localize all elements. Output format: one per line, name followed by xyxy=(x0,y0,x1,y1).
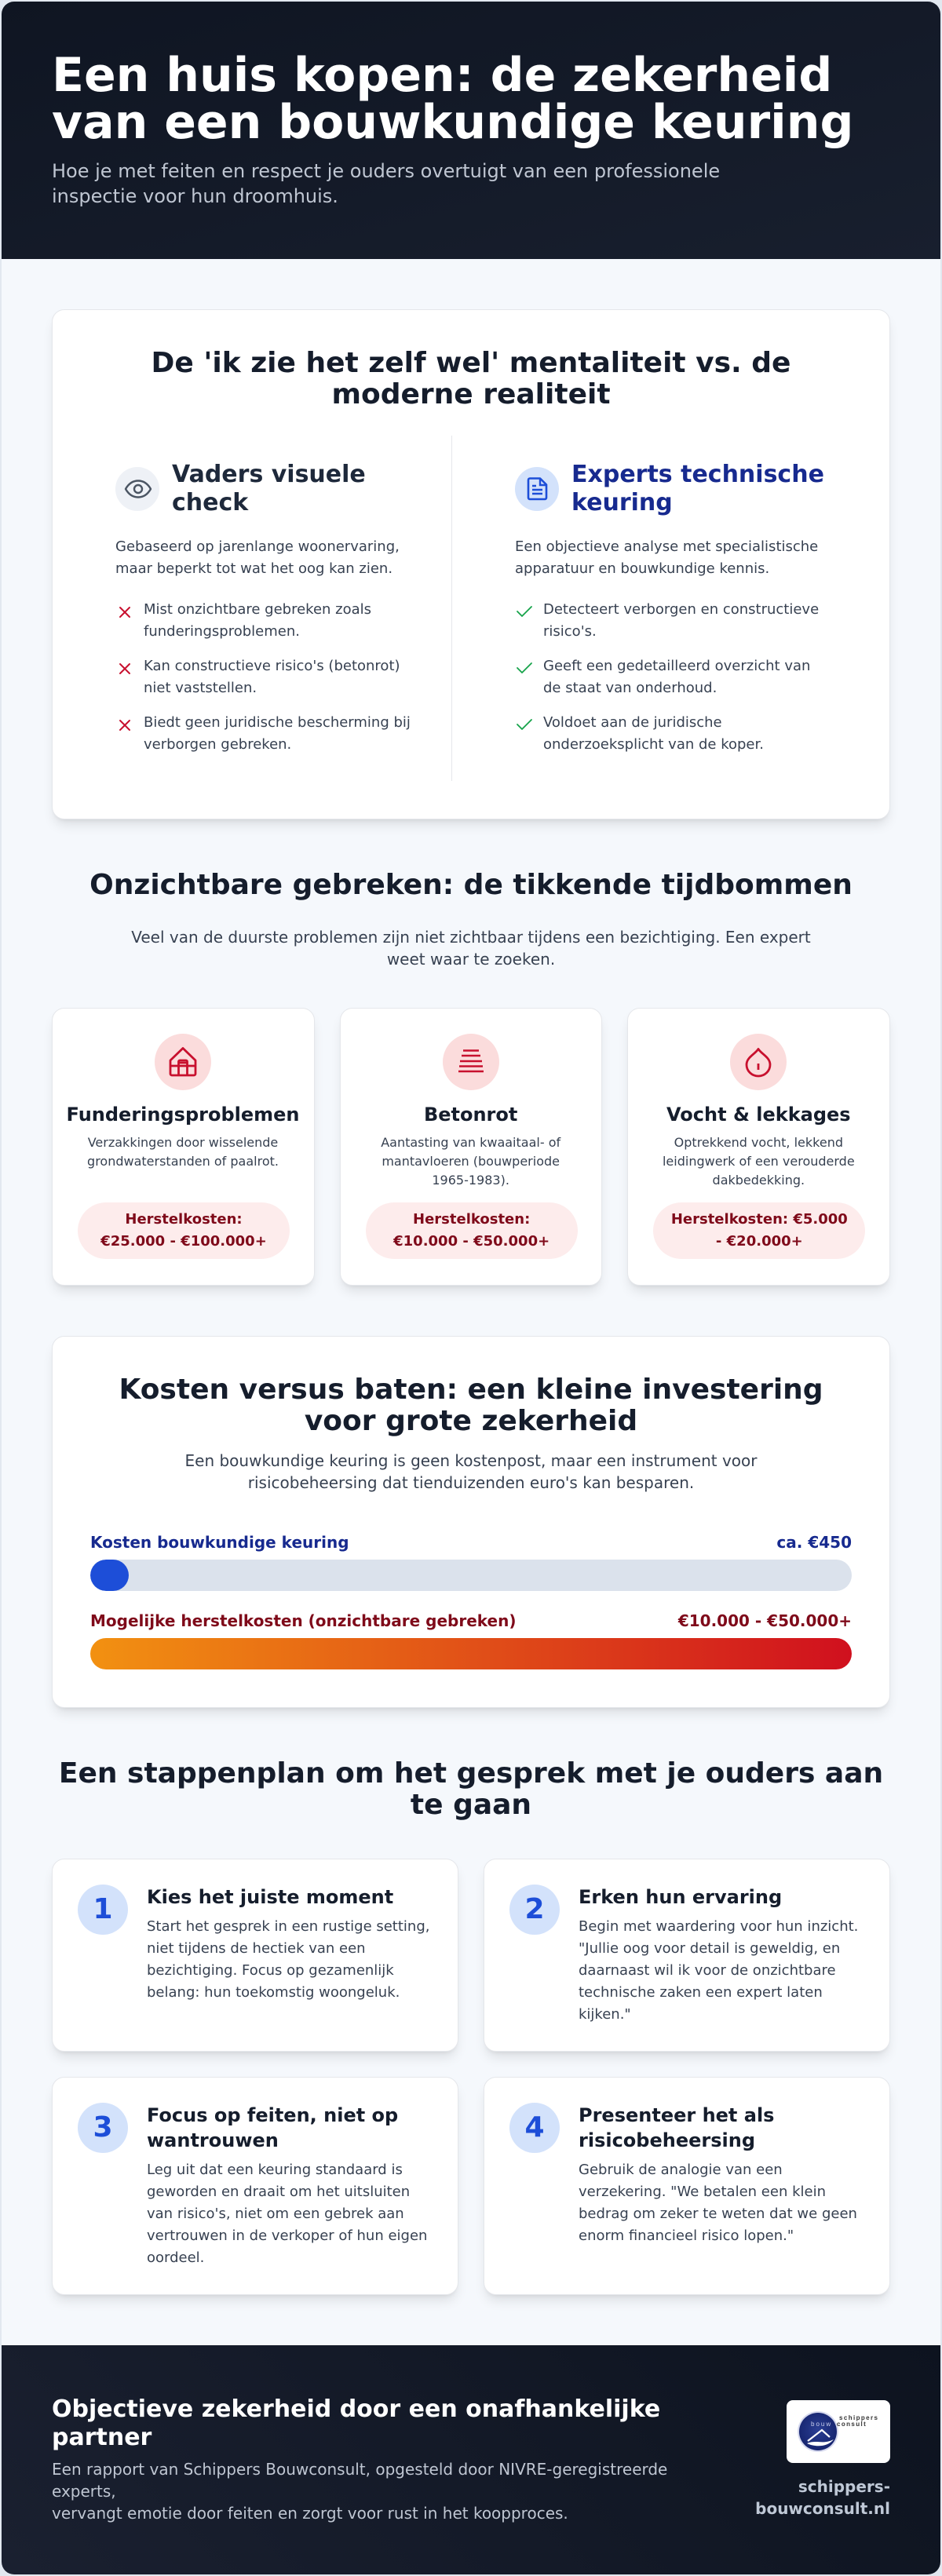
item: funderingsproblemen. xyxy=(144,623,300,640)
left column intro: maar beperkt tot wat het oog kan zien. xyxy=(115,560,392,577)
icon: check xyxy=(517,719,532,730)
footer text xyxy=(52,2460,667,2523)
step text xyxy=(579,2162,857,2244)
right column heading: keuring xyxy=(571,489,673,516)
costs intro xyxy=(185,1451,757,1492)
card text: Verzakkingen door wisselende xyxy=(88,1135,278,1150)
left column intro: Gebaseerd op jarenlange woonervaring, xyxy=(115,538,400,555)
card title: Vocht & lekkages xyxy=(666,1104,851,1126)
costs heading xyxy=(119,1374,823,1437)
card text xyxy=(87,1135,279,1169)
column divider xyxy=(451,436,452,781)
website xyxy=(755,2477,890,2518)
step title: Erken hun ervaring xyxy=(579,1886,782,1908)
panel: step 3 xyxy=(52,2077,458,2295)
subtitle: Hoe je met feiten en respect je ouders overtuigt van een professionele xyxy=(52,160,720,182)
card title: Funderingsproblemen xyxy=(66,1104,300,1126)
logo xyxy=(787,2400,890,2463)
right column heading: Experts technische xyxy=(571,461,824,488)
title: van een bouwkundige keuring xyxy=(52,95,853,150)
step text: vertrouwen in de verkoper of hun eigen xyxy=(147,2228,427,2244)
item: Mist onzichtbare gebreken zoals xyxy=(144,601,371,618)
item xyxy=(543,714,764,753)
step text: Begin met waardering voor hun inzicht. xyxy=(579,1918,858,1935)
step text xyxy=(579,1918,858,2023)
icon: check xyxy=(517,662,532,673)
website: schippers- xyxy=(798,2477,890,2496)
cost pill: - €20.000+ xyxy=(716,1233,803,1250)
icon: eye xyxy=(115,467,159,511)
right column intro: apparatuur en bouwkundige kennis. xyxy=(515,560,769,577)
cost pill xyxy=(653,1202,865,1259)
title xyxy=(52,48,853,150)
icon: cross xyxy=(119,663,130,674)
step text xyxy=(147,1918,429,2001)
step number xyxy=(78,2103,128,2153)
comparison heading xyxy=(152,347,790,410)
step text: kijken." xyxy=(579,2006,631,2023)
item: niet vaststellen. xyxy=(144,680,257,696)
step text: "Jullie oog voor detail is geweldig, en xyxy=(579,1940,840,1957)
costs heading: voor grote zekerheid xyxy=(305,1405,637,1437)
costs intro: Een bouwkundige keuring is geen kostenpost, maar een instrument voor xyxy=(185,1451,757,1470)
heading: step plan: te gaan xyxy=(411,1789,531,1821)
title: Een huis kopen: de zekerheid xyxy=(52,48,832,103)
bar chart: inspection xyxy=(90,1560,852,1591)
hidden defects intro: Veel van de duurste problemen zijn niet zichtbaar tijdens een bezichtiging. Een expert xyxy=(131,928,811,947)
item: Detecteert verborgen en constructieve xyxy=(543,601,819,618)
logo: schippers xyxy=(839,2414,878,2421)
item: Biedt geen juridische bescherming bij xyxy=(144,714,411,731)
item: Geeft een gedetailleerd overzicht van xyxy=(543,658,810,674)
footer heading: Objectieve zekerheid door een onafhankelijke xyxy=(52,2395,660,2423)
cost pill: Herstelkosten: €5.000 xyxy=(671,1211,848,1228)
right column intro xyxy=(515,538,818,577)
icon: check xyxy=(517,606,532,617)
item xyxy=(543,601,819,640)
panel: vocht xyxy=(627,1008,890,1286)
cost pill xyxy=(78,1202,290,1259)
icon: house xyxy=(155,1034,211,1090)
step title: wantrouwen xyxy=(147,2129,279,2151)
hidden defects intro xyxy=(131,928,811,969)
step title: Presenteer het als xyxy=(579,2104,774,2126)
step title xyxy=(579,2104,774,2151)
panel: costs vs benefits xyxy=(52,1336,890,1708)
step number: 2 xyxy=(524,1893,545,1925)
step number xyxy=(509,1885,560,1935)
card text: grondwaterstanden of paalrot. xyxy=(87,1154,279,1169)
step text: niet tijdens de hectiek van een xyxy=(147,1940,366,1957)
bar chart: repair xyxy=(90,1638,852,1669)
heading: hidden defects: Onzichtbare gebreken: de tikkende tijdbommen xyxy=(89,869,853,901)
footer heading: partner xyxy=(52,2424,152,2451)
bar value: repair: €10.000 - €50.000+ xyxy=(678,1611,852,1630)
item: onderzoeksplicht van de koper. xyxy=(543,736,764,753)
right column heading xyxy=(571,461,824,516)
bar fill xyxy=(90,1560,129,1591)
card title: Betonrot xyxy=(424,1104,517,1126)
comparison heading: moderne realiteit xyxy=(331,378,611,410)
bar label: inspection: Kosten bouwkundige keuring xyxy=(90,1533,349,1552)
step text: belang: hun toekomstig woongeluk. xyxy=(147,1984,400,2001)
subtitle: inspectie voor hun droomhuis. xyxy=(52,185,338,207)
logo: consult xyxy=(837,2421,867,2428)
left list xyxy=(119,601,411,753)
item xyxy=(144,658,400,696)
card text xyxy=(381,1135,560,1188)
hidden defects intro: weet waar te zoeken. xyxy=(387,950,555,969)
step text: Start het gesprek in een rustige setting, xyxy=(147,1918,429,1935)
item xyxy=(144,714,411,753)
left column heading: Vaders visuele xyxy=(172,461,366,488)
step text: oordeel. xyxy=(147,2249,204,2266)
step title: Kies het juiste moment xyxy=(147,1886,393,1908)
bar value: inspection: ca. €450 xyxy=(776,1533,852,1552)
item: de staat van onderhoud. xyxy=(543,680,717,696)
cost pill: €10.000 - €50.000+ xyxy=(393,1233,550,1250)
icon: cross xyxy=(119,607,130,618)
card text: leidingwerk of een verouderde xyxy=(663,1154,855,1169)
comparison heading: De 'ik zie het zelf wel' mentaliteit vs. de xyxy=(152,347,790,379)
panel: step 4 xyxy=(484,2077,890,2295)
right column intro: Een objectieve analyse met specialistische xyxy=(515,538,818,555)
costs intro: risicobeheersing dat tienduizenden euro's kan besparen. xyxy=(248,1473,694,1492)
icon: water drop xyxy=(730,1034,787,1090)
step text: van risico's, niet om een gebrek aan xyxy=(147,2206,404,2222)
footer heading xyxy=(52,2395,660,2451)
item xyxy=(543,658,810,696)
panel: step 1 xyxy=(52,1859,458,2052)
step text: enorm financieel risico lopen." xyxy=(579,2228,794,2244)
heading: step plan: Een stappenplan om het gesprek met je ouders aan xyxy=(59,1757,883,1790)
step number: 3 xyxy=(93,2111,113,2144)
left column intro xyxy=(115,538,400,577)
item xyxy=(144,601,371,640)
bar label: repair: Mogelijke herstelkosten (onzichtbare gebreken) xyxy=(90,1611,516,1630)
card text: Optrekkend vocht, lekkend xyxy=(674,1135,843,1150)
card text: mantavloeren (bouwperiode xyxy=(382,1154,560,1169)
panel: funderingsproblemen xyxy=(52,1008,315,1286)
step text: verzekering. "We betalen een klein xyxy=(579,2184,826,2200)
item: verborgen gebreken. xyxy=(144,736,291,753)
item: Kan constructieve risico's (betonrot) xyxy=(144,658,400,674)
cost pill: Herstelkosten: xyxy=(413,1211,530,1228)
panel: step 2 xyxy=(484,1859,890,2052)
cost pill xyxy=(366,1202,578,1259)
step number xyxy=(78,1885,128,1935)
step text xyxy=(147,2162,427,2266)
logo: bouw xyxy=(811,2421,832,2428)
cost pill: Herstelkosten: xyxy=(125,1211,243,1228)
panel: betonrot xyxy=(340,1008,602,1286)
icon: document xyxy=(515,467,559,511)
step number: 1 xyxy=(93,1893,113,1925)
website: bouwconsult.nl xyxy=(755,2499,890,2518)
footer banner xyxy=(0,2345,942,2574)
icon: layers xyxy=(443,1034,499,1090)
step text: daarnaast wil ik voor de onzichtbare xyxy=(579,1962,836,1979)
step number: 4 xyxy=(524,2111,545,2144)
left column heading: check xyxy=(172,489,248,516)
step title xyxy=(147,2104,398,2151)
step number xyxy=(509,2103,560,2153)
step text: Gebruik de analogie van een xyxy=(579,2162,783,2178)
cost pill: €25.000 - €100.000+ xyxy=(100,1233,267,1250)
subtitle xyxy=(52,160,720,207)
right list xyxy=(517,601,819,753)
step title: Focus op feiten, niet op xyxy=(147,2104,398,2126)
step text: bezichtiging. Focus op gezamenlijk xyxy=(147,1962,394,1979)
card text: dakbedekking. xyxy=(713,1173,805,1188)
left column heading xyxy=(172,461,366,516)
step text: geworden en draait om het uitsluiten xyxy=(147,2184,410,2200)
icon: cross xyxy=(119,720,130,731)
footer text: Een rapport van Schippers Bouwconsult, opgesteld door NIVRE-geregistreerde xyxy=(52,2460,667,2479)
step text: technische zaken een expert laten xyxy=(579,1984,823,2001)
item: risico's. xyxy=(543,623,597,640)
panel: comparison xyxy=(52,309,890,819)
step text: Leg uit dat een keuring standaard is xyxy=(147,2162,403,2178)
step text: bedrag om zeker te weten dat we geen xyxy=(579,2206,857,2222)
heading: step plan xyxy=(59,1757,883,1821)
footer text: experts, xyxy=(52,2482,116,2501)
step title: risicobeheersing xyxy=(579,2129,755,2151)
card text: Aantasting van kwaaitaal- of xyxy=(381,1135,560,1150)
header banner xyxy=(0,0,942,259)
card text: 1965-1983). xyxy=(432,1173,509,1188)
footer text: vervangt emotie door feiten en zorgt voor rust in het koopproces. xyxy=(52,2504,568,2523)
item: Voldoet aan de juridische xyxy=(543,714,722,731)
costs heading: Kosten versus baten: een kleine investering xyxy=(119,1374,823,1406)
card text xyxy=(663,1135,855,1188)
